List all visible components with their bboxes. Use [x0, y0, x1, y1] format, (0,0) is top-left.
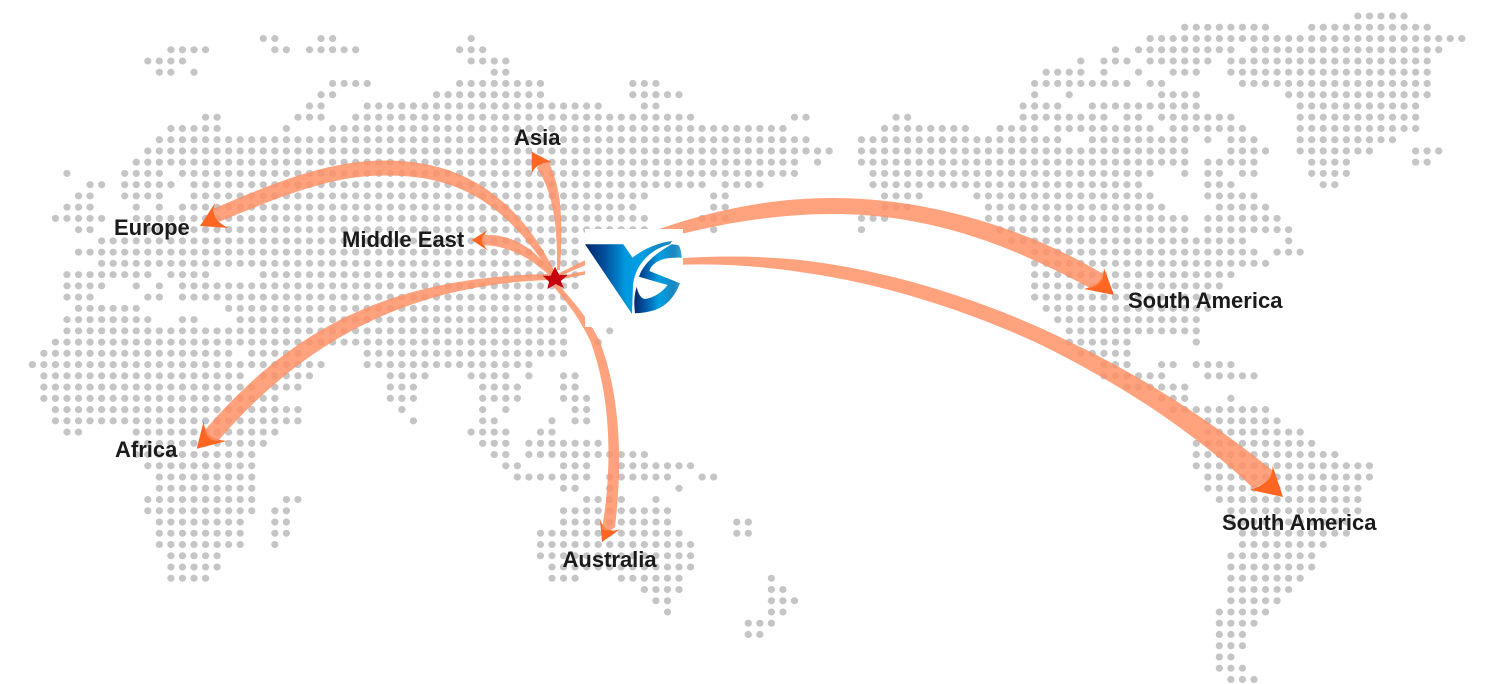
- origin marker: red star: [543, 267, 568, 289]
- label: Australia: Australia: [562, 547, 657, 572]
- arrow: to South America (upper): [558, 198, 1114, 295]
- arrow: to South America (lower): [558, 257, 1283, 497]
- map section: right continents: [861, 16, 1463, 679]
- logo letter S: [634, 244, 682, 313]
- arrow: to Middle East: [472, 230, 553, 276]
- arrow: to Europe: [200, 160, 555, 274]
- label: Asia: Asia: [514, 125, 561, 150]
- label: Africa: Africa: [115, 437, 178, 462]
- label: Middle East: Middle East: [342, 227, 465, 252]
- logo: VS company mark on white box: [585, 229, 683, 327]
- arrow: to Australia: [553, 284, 621, 542]
- arrow: to Asia: [532, 152, 561, 270]
- logo letter V: [585, 241, 672, 314]
- label: South America (upper): South America: [1128, 288, 1283, 313]
- label: Europe: Europe: [114, 215, 190, 240]
- arrow: to Africa: [197, 274, 548, 449]
- map section: Americas-left continents: [32, 38, 830, 634]
- label: South America (lower): South America: [1222, 510, 1377, 535]
